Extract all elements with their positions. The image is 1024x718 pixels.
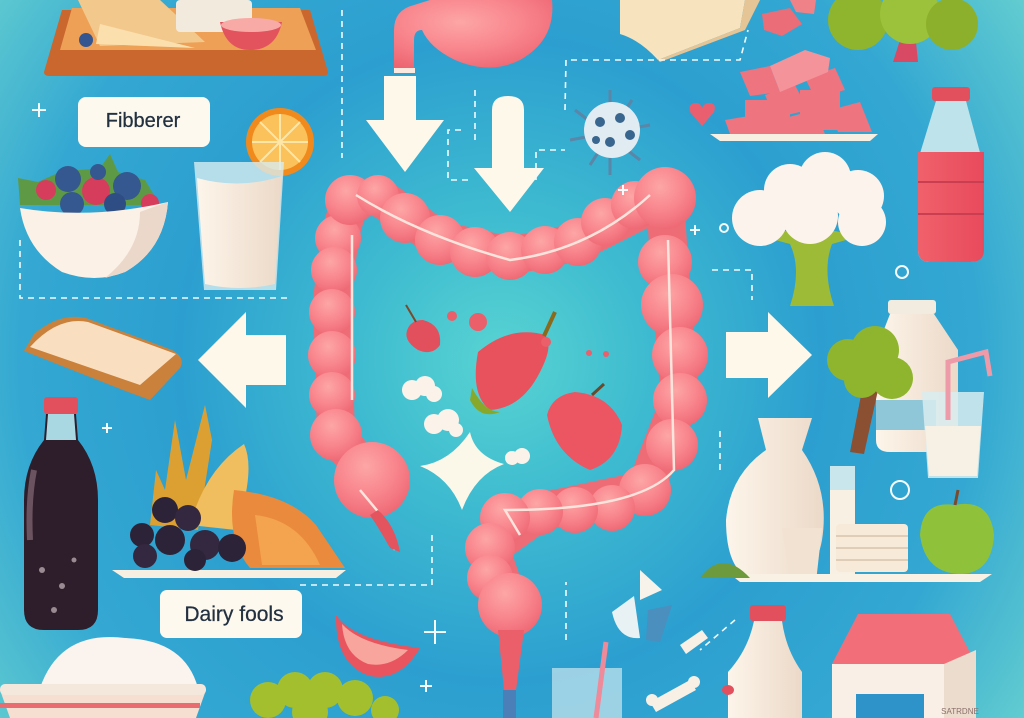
rectum <box>498 630 524 690</box>
center clouds <box>402 376 530 465</box>
rectum base <box>503 690 516 718</box>
red bottle <box>918 87 984 262</box>
colon <box>308 167 708 690</box>
center food: apple <box>547 384 622 470</box>
watermelon slice <box>336 615 420 677</box>
label: Dairy fools <box>160 590 302 638</box>
down arrow tall <box>474 96 544 212</box>
rice bowl <box>0 637 206 718</box>
orange slice <box>246 108 314 176</box>
sparkle icons <box>32 103 909 692</box>
colon lobes <box>308 167 708 637</box>
label: Fibberer <box>78 97 210 147</box>
down arrow outline <box>366 76 444 172</box>
center food: pepper <box>470 312 555 414</box>
apple <box>920 490 994 574</box>
milk carton: SATRDNE <box>941 707 979 716</box>
green tree <box>827 326 913 454</box>
label: Dairy fools: Dairy fools <box>184 603 284 626</box>
heart icon <box>690 103 715 126</box>
bread slice <box>24 317 182 400</box>
tofu block <box>620 0 816 62</box>
tree top right <box>828 0 978 62</box>
cola bottle <box>24 397 98 630</box>
water glass with straw <box>552 642 622 718</box>
center small dots <box>447 311 609 357</box>
recycle icon <box>612 570 672 642</box>
milk glass and stack <box>782 466 908 582</box>
left arrow <box>198 312 286 408</box>
pink tofu plate <box>710 50 878 141</box>
berry bowl <box>18 154 168 278</box>
milk jug right <box>876 300 958 452</box>
center food: small red apple <box>406 305 440 352</box>
stomach <box>394 0 552 73</box>
cutting board with food <box>44 0 328 76</box>
right arrow <box>726 312 812 398</box>
grain and berries plate <box>112 405 346 578</box>
cauliflower tree <box>732 152 886 306</box>
star sparkle <box>420 432 504 510</box>
milk bottle bottom <box>728 605 802 718</box>
virus icon <box>570 90 650 175</box>
colon tail <box>370 510 400 552</box>
plate <box>730 574 992 582</box>
leaves <box>700 563 750 578</box>
green grapes <box>250 672 399 718</box>
colon inner line <box>352 195 674 550</box>
milk carton <box>832 614 979 718</box>
dashed flow lines <box>20 10 752 650</box>
glass with straw <box>922 352 990 478</box>
vase <box>726 418 824 580</box>
glass of milk <box>194 162 284 290</box>
bones and pills <box>646 630 734 712</box>
label: Fibberer: Fibberer <box>106 110 181 132</box>
colon tube <box>332 196 680 605</box>
